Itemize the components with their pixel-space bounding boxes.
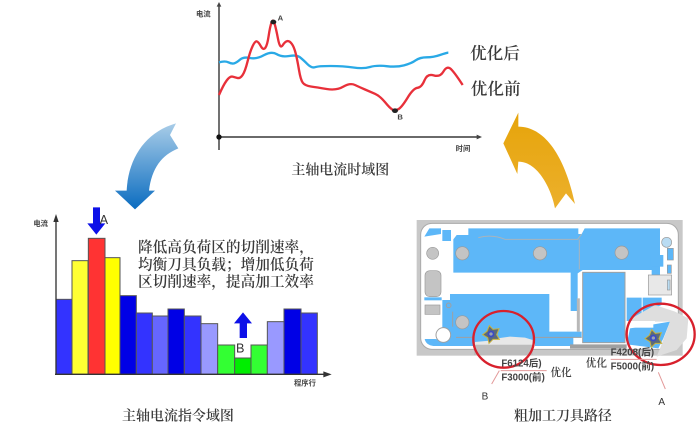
feed rate B: F6124后) (501, 358, 542, 370)
grey circles and blocks (425, 246, 628, 329)
annotation text: 降低高负荷区的切削速率， (138, 236, 314, 257)
x axis label: 程序行 (294, 378, 317, 387)
blue pocket: top (453, 228, 660, 311)
blue pocket: middle (583, 272, 625, 343)
blue strip: left (424, 297, 442, 300)
marker A (270, 14, 284, 24)
axes (217, 2, 482, 150)
red circle A (627, 304, 695, 365)
feed rate A: F4208(后) (611, 347, 654, 359)
feed rate A (611, 347, 654, 373)
label A: A (658, 397, 665, 408)
annotation text (138, 236, 314, 291)
inner channel lines (436, 298, 582, 342)
label optimise A: 优化 (586, 355, 607, 370)
bottom strip (570, 344, 627, 349)
legend: after: 优化后 (470, 40, 520, 64)
arrow: up B (234, 312, 252, 338)
arrow: orange curved left (503, 113, 575, 208)
axes (53, 214, 332, 377)
label B: B (482, 392, 489, 403)
tool A (645, 330, 662, 347)
panel: spindle current instruction-domain chart (33, 207, 332, 426)
annotation text: 区切削速率，提高加工效率 (138, 270, 314, 291)
feed rate A: F5000(前) (611, 361, 654, 373)
origin dot (216, 134, 222, 140)
tool B (483, 326, 499, 343)
legend: before: 优化前 (471, 75, 521, 99)
machined white slot (630, 322, 653, 328)
feed rate B (501, 358, 545, 384)
marker A: A (278, 14, 284, 23)
label A: A (100, 213, 109, 227)
y axis label: 电流 (33, 219, 49, 228)
line: before optimisation (219, 21, 463, 110)
channel lines in top pocket (478, 234, 582, 269)
panel: spindle current time-domain chart (196, 2, 521, 180)
caption: 粗加工刀具路径 (514, 406, 612, 426)
part frame (417, 220, 683, 356)
right-side features (648, 237, 673, 295)
marker B (392, 108, 403, 122)
leader lines (492, 359, 665, 389)
arrow: blue curved down (115, 123, 178, 209)
blue pocket: upper-left (424, 228, 441, 237)
red circle B (473, 311, 534, 368)
panel: roughing tool path (417, 220, 695, 426)
blue pocket: lower-right (627, 298, 670, 348)
machined area B (475, 337, 533, 345)
machined area A (632, 305, 688, 357)
label optimise B: 优化 (550, 365, 572, 380)
bars (56, 238, 317, 374)
marker B: B (397, 113, 403, 122)
line: after optimisation (219, 53, 448, 68)
feed rate B: F3000(前) (501, 372, 545, 384)
blue pocket: small square (442, 230, 451, 241)
label B: B (236, 342, 244, 356)
caption: 主轴电流指令域图 (122, 406, 234, 426)
x axis label: 时间 (456, 144, 470, 153)
y axis label: 电流 (196, 9, 211, 18)
annotation text: 均衡刀具负载；增加低负荷 (138, 253, 314, 274)
blue pocket: lower-left (425, 294, 582, 346)
caption: 主轴电流时域图 (291, 160, 389, 180)
arrow: down A (87, 207, 105, 235)
